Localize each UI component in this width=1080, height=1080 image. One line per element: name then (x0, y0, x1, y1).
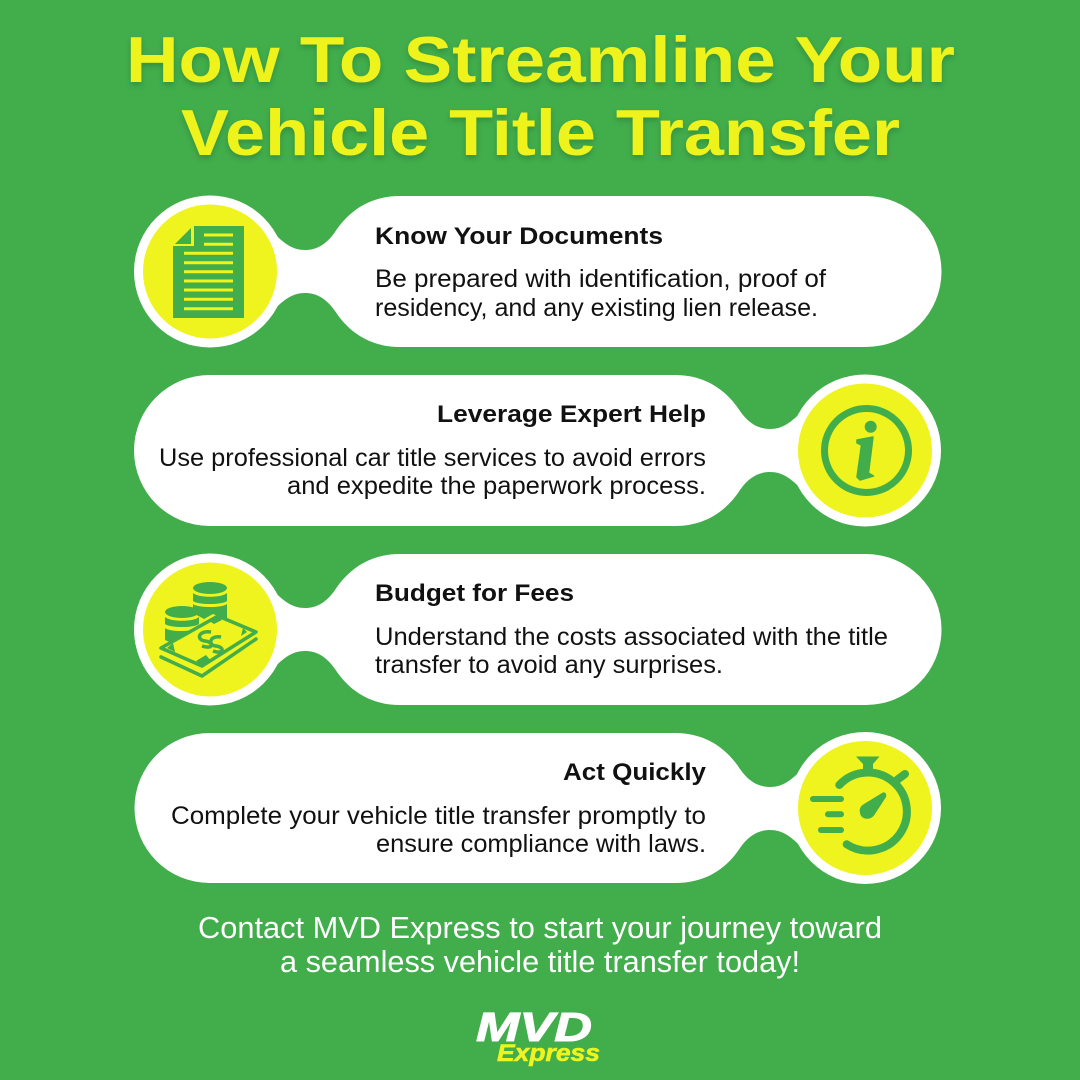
icon: money and coins (134, 554, 286, 706)
text block: ensure compliance with laws. (376, 830, 706, 858)
heading: Act Quickly (563, 759, 707, 786)
icon: document (134, 196, 286, 348)
panel shape (272, 554, 942, 705)
call to action: Contact MVD Express to start your journey toward (198, 911, 882, 945)
text block (375, 623, 888, 679)
text block: Use professional car title services to avoid errors (159, 444, 706, 472)
text block (375, 265, 826, 322)
heading: Budget for Fees (375, 580, 574, 607)
title: Vehicle Title Transfer (181, 96, 900, 169)
text block (159, 444, 706, 500)
logo: Express (497, 1040, 600, 1067)
logo: MVD (476, 1004, 592, 1050)
text block: Understand the costs associated with the title (375, 623, 888, 651)
panel: act quickly (134, 732, 941, 884)
panel: budget for fees (134, 554, 942, 706)
panel shape (272, 196, 942, 347)
title: How To Streamline Your (126, 23, 955, 96)
text block (171, 802, 706, 858)
text block: transfer to avoid any surprises. (375, 651, 723, 679)
text block: residency, and any existing lien release. (375, 294, 818, 322)
heading: Know Your Documents (375, 223, 663, 250)
logo (476, 1004, 600, 1067)
panel shape (134, 733, 803, 883)
call to action: a seamless vehicle title transfer today! (280, 945, 800, 979)
icon: stopwatch (789, 732, 941, 884)
icon: information (789, 374, 941, 526)
title (126, 23, 955, 169)
call to action (198, 911, 882, 979)
panel shape (134, 375, 803, 526)
heading: Leverage Expert Help (437, 401, 706, 428)
text block: and expedite the paperwork process. (287, 472, 706, 500)
text block: Be prepared with identification, proof of (375, 265, 826, 293)
text block: Complete your vehicle title transfer promptly to (171, 802, 706, 830)
panel: know your documents (134, 196, 942, 348)
panel: leverage expert help (134, 374, 941, 526)
